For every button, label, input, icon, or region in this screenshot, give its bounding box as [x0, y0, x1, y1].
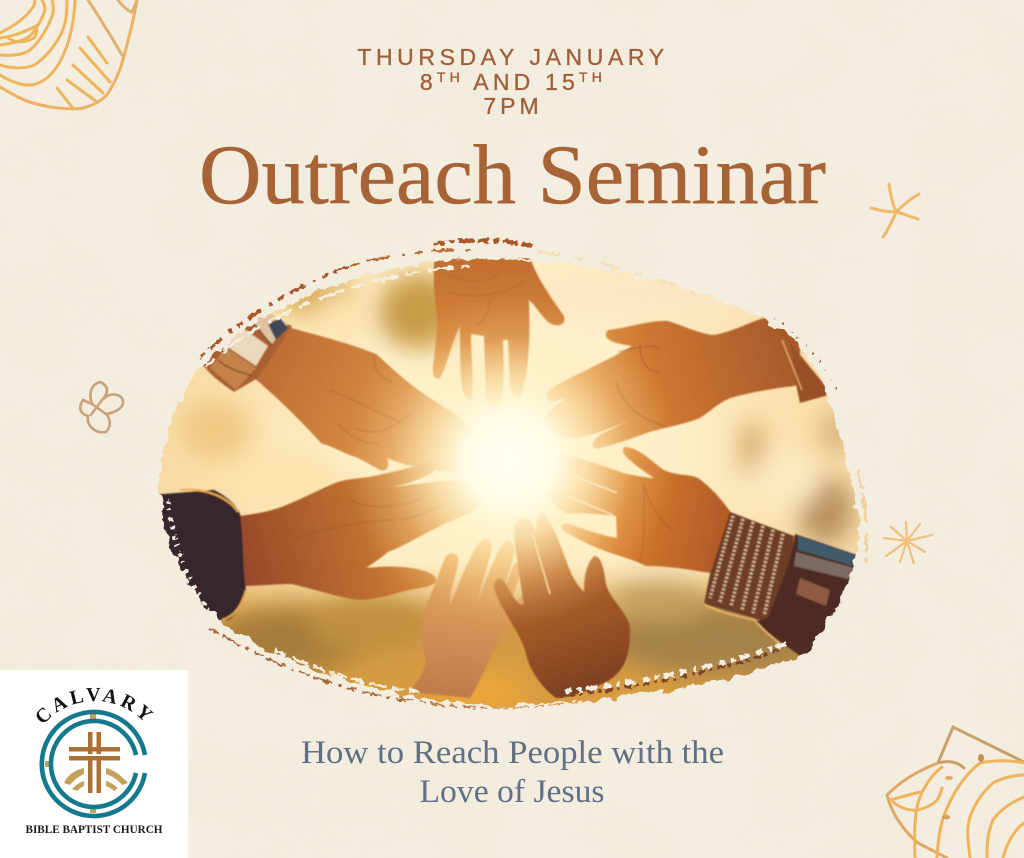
hand: top [433, 244, 565, 411]
logo: teal C rings [42, 712, 145, 816]
date text: THURSDAY JANUARY [357, 44, 669, 70]
hand: top-left with watch [198, 308, 478, 472]
icon: star doodle [871, 184, 919, 237]
date text: TH [437, 69, 464, 85]
photo background [158, 259, 862, 709]
logo: gold rays [64, 768, 128, 791]
title: Outreach Seminar [199, 128, 826, 222]
date text: 8 [420, 69, 437, 95]
logo panel [0, 670, 188, 858]
icon: sun doodle [884, 522, 932, 564]
logo: cross [69, 732, 120, 793]
hand: bottom centre-left, light [410, 539, 527, 698]
hand: top-right with cuff [544, 318, 832, 449]
logo: CALVARY arc text: CALVARY [36, 688, 154, 722]
brush stroke edges [168, 240, 867, 708]
subtitle [301, 735, 724, 810]
date text: TH [579, 69, 606, 85]
subtitle: How to Reach People with the [301, 735, 724, 771]
decoration: top-left shell [0, 0, 137, 109]
hand: bottom centre-right, dark [494, 513, 630, 698]
panel: sunburst hands photo [158, 237, 870, 710]
date text: 7PM [483, 93, 543, 119]
hand: bottom-right with bangles and sleeve [539, 447, 860, 660]
decoration: bottom-right shell [887, 727, 1024, 858]
date text: AND 15 [464, 69, 579, 95]
sunburst glow [360, 310, 661, 613]
logo: church name: BIBLE BAPTIST CHURCH [26, 824, 163, 836]
icon: flower doodle [80, 382, 123, 432]
logo: gold ticks [45, 714, 96, 813]
date text [357, 44, 669, 119]
hand: bottom-left with dark sleeve [150, 462, 484, 620]
subtitle: Love of Jesus [420, 774, 604, 810]
